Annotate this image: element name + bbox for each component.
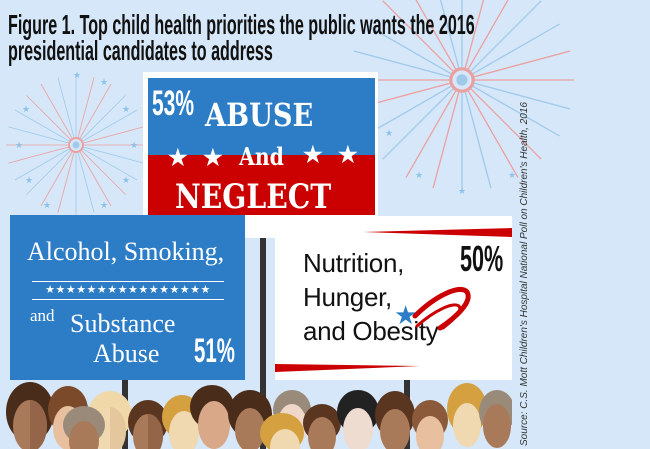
source note: Source: C.S. Mott Children's Hospital National Poll on Children's Health, 2016 [519, 102, 530, 446]
percentage 53%: 53% [152, 84, 194, 123]
background fireworks: ★ [73, 70, 81, 80]
text: and Substance Abuse: and [30, 306, 55, 325]
background fireworks: ★ [385, 128, 393, 138]
stars and And: ★ ★ [303, 142, 358, 168]
icon: star and ribbon [394, 286, 471, 330]
title [8, 9, 475, 66]
sign: abuse and neglect [143, 72, 378, 238]
background fireworks: ★ [122, 104, 130, 114]
text: NEGLECT: NEGLECT [175, 177, 331, 217]
percentage 51%: 51% [194, 332, 235, 370]
background fireworks: ★ [458, 186, 466, 196]
background fireworks: ★ [25, 175, 33, 185]
stars and And: And [239, 142, 284, 171]
text: ABUSE: ABUSE [205, 96, 313, 134]
background fireworks: ★ [122, 175, 130, 185]
stars divider: ★★★★★★★★★★★★★★★★ [45, 284, 211, 296]
title: Figure 1. Top child health priorities the public wants the 2016 [8, 9, 475, 40]
sign: alcohol smoking substance abuse: Abuse [93, 339, 159, 368]
stars and And: ★ ★ [168, 145, 223, 171]
percentage 50%: 50% [460, 238, 503, 279]
stars divider [32, 281, 224, 300]
sign: alcohol smoking substance abuse [10, 215, 245, 380]
background fireworks: ★ [100, 200, 108, 210]
text: Nutrition, Hunger, and Obesity [303, 248, 438, 346]
background fireworks: ★ [43, 200, 51, 210]
background fireworks: ★ [508, 170, 516, 180]
background fireworks: ★ [130, 140, 138, 150]
background fireworks: ★ [100, 77, 108, 87]
text: Nutrition, Hunger, and Obesity: Nutrition, [303, 248, 404, 278]
text: Nutrition, Hunger, and Obesity: Hunger, [303, 282, 392, 312]
sign: nutrition hunger obesity [275, 216, 512, 380]
text: Alcohol, Smoking: Alcohol, Smoking, [27, 237, 224, 266]
background fireworks: ★ [15, 140, 23, 150]
background fireworks: ★ [415, 170, 423, 180]
icon: star and ribbon: ★ [394, 300, 417, 330]
crowd of people [6, 382, 512, 449]
stars and And [168, 142, 358, 171]
text: Nutrition, Hunger, and Obesity: and Obesity [303, 316, 438, 346]
title: presidential candidates to address [8, 35, 273, 66]
sign: alcohol smoking substance abuse: Substance [70, 309, 175, 338]
background fireworks: ★ [22, 104, 30, 114]
